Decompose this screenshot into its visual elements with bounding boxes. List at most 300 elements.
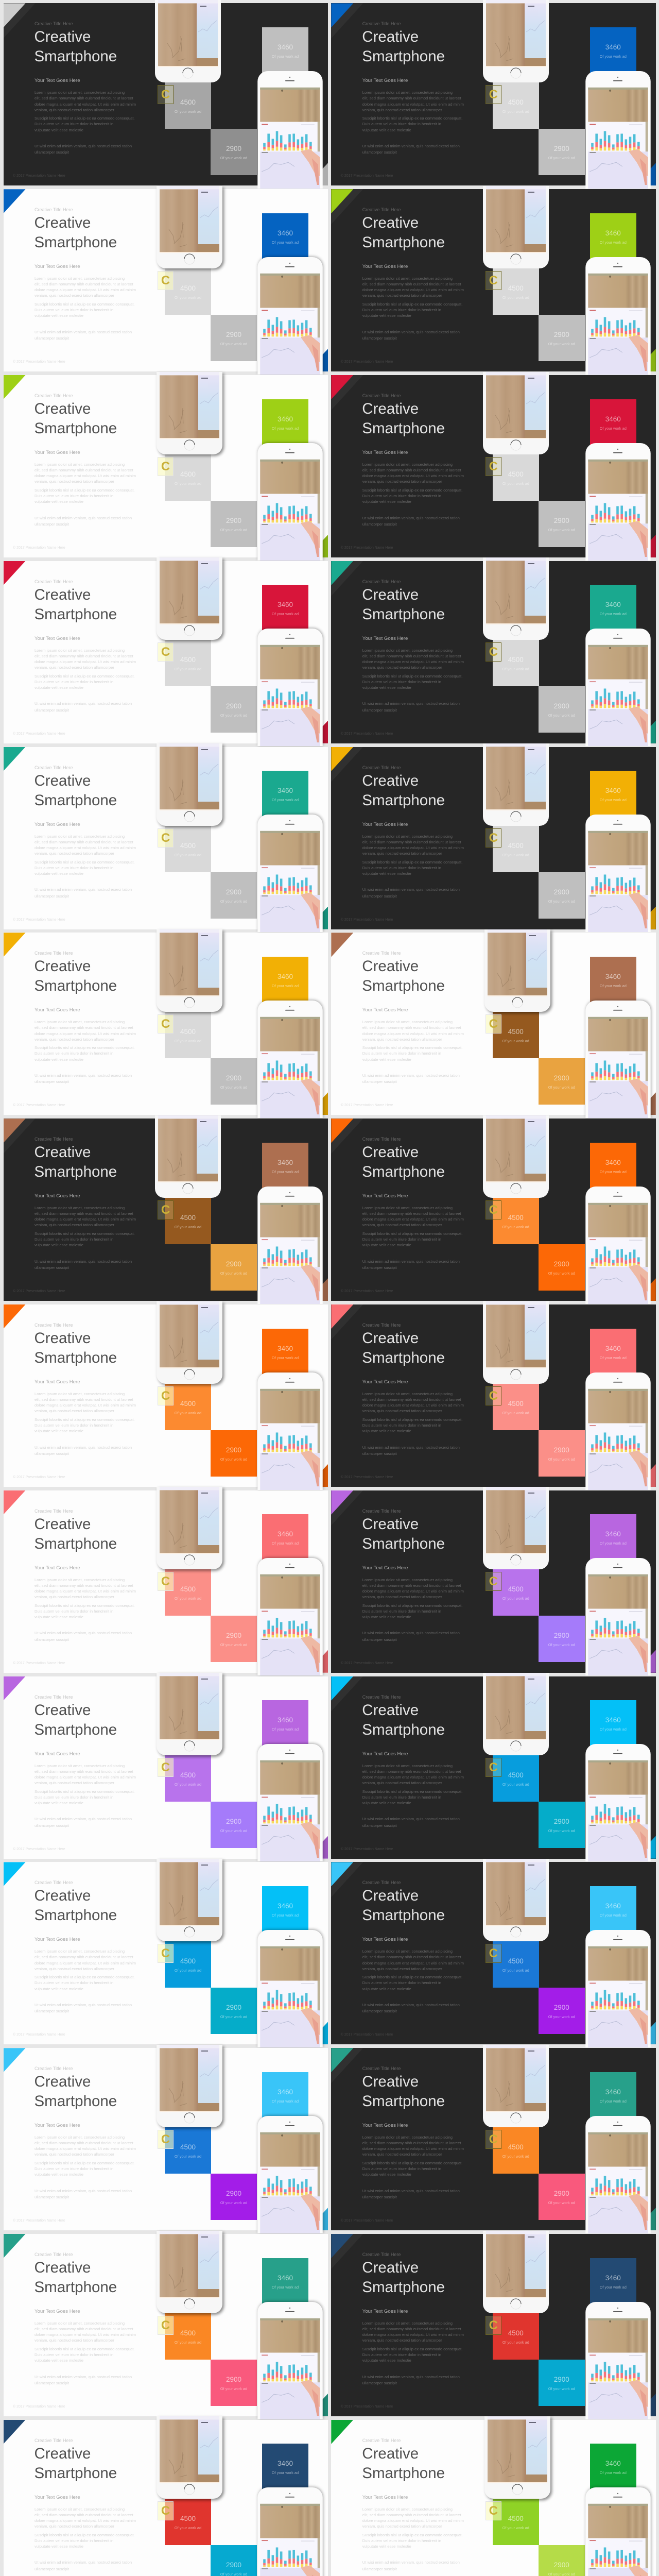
- footer: © 2017 Presentation Name Here: [341, 1848, 393, 1851]
- title: Creative: [34, 28, 91, 45]
- body text: veniam, quis nostrud exerci tation ullamcorper: [34, 665, 114, 670]
- body text: elit, sed diam nonummy nibh euismod tincidunt ut laoreet: [34, 2513, 133, 2517]
- stat C: [539, 501, 585, 547]
- stat C: 2900: [226, 331, 241, 338]
- body text: veniam, quis nostrud exerci tation ullamcorper: [362, 479, 442, 484]
- icon: watermark: [158, 642, 174, 662]
- note: [34, 2002, 132, 2015]
- body text 2: Suscipit lobortis nisl ut aliquip ex ea commodo consequat.: [362, 1603, 462, 1608]
- stat A: Of your work ad: [600, 798, 627, 802]
- title: Smartphone: [34, 1907, 117, 1924]
- stat B: [493, 1755, 539, 1802]
- stat A: Of your work ad: [600, 2470, 627, 2475]
- body text: elit, sed diam nonummy nibh euismod tincidunt ut laoreet: [362, 1025, 461, 1030]
- corner accent: [3, 1862, 26, 1886]
- phone bottom: [257, 629, 323, 746]
- body text 2: Suscipit lobortis nisl ut aliquip ex ea commodo consequat.: [34, 2161, 135, 2165]
- panel: slide 22 dark sky: [331, 1862, 656, 2044]
- icon: watermark: [485, 1386, 501, 1405]
- kicker: Creative Title Here: [34, 951, 73, 956]
- note: ullamcorper suscipit: [34, 708, 69, 713]
- subheading: Your Text Goes Here: [34, 1751, 80, 1757]
- body text 2: vulputate velit esse molestie: [34, 1057, 83, 1062]
- stat C: Of your work ad: [548, 1271, 575, 1276]
- title: Creative: [362, 1702, 419, 1719]
- body text 2: [362, 1603, 462, 1620]
- stat C: 2900: [554, 2561, 569, 2569]
- body text: veniam, quis nostrud exerci tation ullamcorper: [362, 2338, 442, 2343]
- body text 2: vulputate velit esse molestie: [34, 1987, 83, 1991]
- note: Ut wisi enim ad minim veniam, quis nostrud exerci tation: [362, 330, 460, 334]
- phone top: [483, 1673, 549, 1755]
- body text: veniam, quis nostrud exerci tation ullamcorper: [34, 1409, 114, 1413]
- corner accent bottom: [649, 2208, 656, 2230]
- body text: Lorem ipsum dolor sit amet, consectetuer adipiscing: [34, 1578, 125, 1582]
- body text: dolore magna aliquam erat volutpat. Ut wisi enim ad minim: [34, 1031, 136, 1036]
- phone top: [483, 2045, 549, 2127]
- stat C: 2900: [554, 2376, 569, 2383]
- note: [34, 701, 132, 714]
- stat B: 4500: [180, 284, 196, 292]
- kicker: Creative Title Here: [362, 2066, 401, 2071]
- stat C: [539, 1616, 585, 1662]
- stat B: 4500: [508, 2329, 524, 2337]
- body text 2: Duis autem vel eum iriure dolor in hendrerit in: [362, 2538, 441, 2543]
- title: [362, 1886, 445, 1925]
- panel: slide 13 dark brown: [3, 1118, 328, 1301]
- icon: watermark: C: [489, 2132, 498, 2146]
- title: [362, 399, 445, 438]
- subheading: Your Text Goes Here: [362, 636, 408, 641]
- icon: watermark: [485, 1944, 501, 1963]
- body text: [362, 1577, 464, 1600]
- subheading: Your Text Goes Here: [34, 1379, 80, 1385]
- body text: veniam, quis nostrud exerci tation ullamcorper: [34, 1037, 114, 1042]
- note: [34, 2374, 132, 2386]
- stat B: [165, 268, 211, 315]
- subheading: Your Text Goes Here: [34, 2309, 80, 2314]
- body text: veniam, quis nostrud exerci tation ullamcorper: [362, 851, 442, 856]
- kicker: Creative Title Here: [362, 21, 401, 26]
- corner accent: [331, 747, 353, 771]
- stat A: 3460: [605, 601, 621, 608]
- subheading: Your Text Goes Here: [34, 1007, 80, 1013]
- phone top: [483, 1301, 549, 1384]
- body text: Lorem ipsum dolor sit amet, consectetuer adipiscing: [362, 1578, 453, 1582]
- phone top: [157, 2045, 222, 2127]
- kicker: Creative Title Here: [362, 393, 401, 398]
- panel: slide 19 light purple: [3, 1676, 328, 1859]
- body text 2: Duis autem vel eum iriure dolor in hendrerit in: [34, 2352, 113, 2357]
- title: [34, 214, 117, 251]
- corner accent bottom: [321, 907, 328, 929]
- stat B: 4500: [180, 1214, 196, 1222]
- body text: elit, sed diam nonummy nibh euismod tincidunt ut laoreet: [362, 1583, 461, 1588]
- stat B: [165, 1198, 211, 1244]
- body text: veniam, quis nostrud exerci tation ullamcorper: [34, 1595, 114, 1599]
- body text 2: [362, 1974, 462, 1992]
- stat A: Of your work ad: [272, 984, 299, 988]
- panel: slide 28 light green: [331, 2420, 656, 2576]
- stat C: [211, 2360, 257, 2406]
- corner accent bottom: [649, 2022, 656, 2044]
- body text 2: Duis autem vel eum iriure dolor in hendrerit in: [362, 1795, 441, 1800]
- stat C: Of your work ad: [548, 1085, 575, 1090]
- stat B: [493, 2127, 539, 2174]
- icon: watermark: C: [489, 460, 498, 473]
- body text: Lorem ipsum dolor sit amet, consectetuer adipiscing: [362, 2135, 453, 2140]
- stat C: [539, 1430, 585, 1477]
- stat C: Of your work ad: [548, 713, 575, 718]
- corner accent: [331, 3, 353, 27]
- phone bottom: [257, 2487, 323, 2576]
- body text: dolore magna aliquam erat volutpat. Ut wisi enim ad minim: [362, 1589, 464, 1594]
- note: ullamcorper suscipit: [34, 894, 69, 899]
- body text: [362, 1948, 464, 1972]
- stat C: Of your work ad: [220, 1271, 247, 1276]
- body text: elit, sed diam nonummy nibh euismod tincidunt ut laoreet: [362, 1397, 461, 1402]
- icon: watermark: C: [161, 2504, 170, 2518]
- icon: watermark: C: [489, 88, 498, 101]
- stat B: Of your work ad: [175, 2340, 201, 2345]
- body text: dolore magna aliquam erat volutpat. Ut wisi enim ad minim: [34, 845, 136, 850]
- note: Ut wisi enim ad minim veniam, quis nostrud exerci tation: [34, 1073, 132, 1078]
- body text: Lorem ipsum dolor sit amet, consectetuer adipiscing: [34, 90, 125, 95]
- panel: slide 6 dark red: [331, 375, 656, 557]
- footer: © 2017 Presentation Name Here: [341, 732, 393, 736]
- icon: watermark: [485, 1014, 501, 1033]
- note: Ut wisi enim ad minim veniam, quis nostrud exerci tation: [362, 1631, 460, 1635]
- stat B: Of your work ad: [502, 2340, 529, 2345]
- stat C: 2900: [554, 888, 569, 896]
- note: Ut wisi enim ad minim veniam, quis nostrud exerci tation: [34, 887, 132, 892]
- body text 2: vulputate velit esse molestie: [362, 128, 411, 132]
- body text: [34, 1948, 136, 1972]
- icon: watermark: C: [489, 1017, 498, 1031]
- stat C: Of your work ad: [220, 1642, 247, 1647]
- note: Ut wisi enim ad minim veniam, quis nostrud exerci tation: [362, 1445, 460, 1450]
- stat B: 4500: [508, 1400, 524, 1408]
- body text: veniam, quis nostrud exerci tation ullamcorper: [34, 293, 114, 298]
- corner accent bottom: [321, 1092, 328, 1115]
- body text: elit, sed diam nonummy nibh euismod tincidunt ut laoreet: [34, 96, 133, 100]
- stat A: Of your work ad: [600, 612, 627, 616]
- title: Smartphone: [362, 2279, 445, 2296]
- phone bottom: [585, 71, 651, 189]
- body text 2: vulputate velit esse molestie: [362, 1429, 411, 1433]
- title: Smartphone: [362, 420, 445, 437]
- footer: © 2017 Presentation Name Here: [13, 918, 65, 922]
- stat B: [165, 1384, 211, 1430]
- stat B: [165, 1012, 211, 1058]
- body text 2: Suscipit lobortis nisl ut aliquip ex ea commodo consequat.: [34, 1789, 135, 1794]
- subheading: Your Text Goes Here: [362, 78, 408, 83]
- body text 2: [34, 2346, 135, 2363]
- body text: dolore magna aliquam erat volutpat. Ut wisi enim ad minim: [362, 1961, 464, 1965]
- body text 2: vulputate velit esse molestie: [362, 2544, 411, 2549]
- body text 2: Suscipit lobortis nisl ut aliquip ex ea commodo consequat.: [362, 116, 462, 121]
- body text: veniam, quis nostrud exerci tation ullamcorper: [362, 1223, 442, 1227]
- title: Smartphone: [34, 606, 117, 623]
- kicker: Creative Title Here: [362, 1694, 401, 1700]
- body text 2: [362, 487, 462, 504]
- stat C: 2900: [226, 1446, 241, 1454]
- body text 2: Duis autem vel eum iriure dolor in hendrerit in: [34, 1795, 113, 1800]
- body text 2: vulputate velit esse molestie: [362, 499, 411, 504]
- note: [34, 2560, 132, 2572]
- corner accent: [3, 189, 26, 213]
- panel: slide 11 light amber: [3, 933, 328, 1115]
- body text 2: [362, 301, 462, 318]
- body text 2: vulputate velit esse molestie: [34, 1615, 83, 1619]
- note: Ut wisi enim ad minim veniam, quis nostrud exerci tation: [362, 515, 460, 520]
- body text 2: Duis autem vel eum iriure dolor in hendrerit in: [362, 1051, 441, 1056]
- stat B: 4500: [180, 2143, 196, 2151]
- footer: © 2017 Presentation Name Here: [13, 1476, 65, 1479]
- body text: [34, 1577, 136, 1600]
- body text 2: vulputate velit esse molestie: [362, 1243, 411, 1247]
- body text: Lorem ipsum dolor sit amet, consectetuer adipiscing: [34, 1949, 125, 1954]
- stat B: 4500: [180, 1028, 196, 1036]
- corner accent bottom: [322, 349, 328, 371]
- note: Ut wisi enim ad minim veniam, quis nostrud exerci tation: [362, 1259, 460, 1264]
- stat A: 3460: [605, 2088, 621, 2096]
- stat B: 4500: [180, 98, 196, 106]
- body text: dolore magna aliquam erat volutpat. Ut wisi enim ad minim: [34, 1217, 136, 1222]
- phone bottom: [585, 1187, 651, 1304]
- body text: [362, 834, 464, 856]
- body text 2: Suscipit lobortis nisl ut aliquip ex ea commodo consequat.: [34, 488, 135, 493]
- stat C: Of your work ad: [220, 1828, 247, 1833]
- title: Smartphone: [34, 420, 117, 437]
- stat C: 2900: [554, 702, 569, 710]
- stat B: 4500: [180, 470, 196, 478]
- body text 2: Suscipit lobortis nisl ut aliquip ex ea commodo consequat.: [34, 116, 135, 121]
- note: Ut wisi enim ad minim veniam, quis nostrud exerci tation: [362, 1073, 460, 1078]
- stat C: 2900: [554, 2004, 569, 2011]
- footer: © 2017 Presentation Name Here: [13, 174, 65, 178]
- body text: [34, 2320, 136, 2343]
- corner accent: [3, 3, 26, 27]
- body text: Lorem ipsum dolor sit amet, consectetuer adipiscing: [34, 834, 125, 839]
- body text 2: Duis autem vel eum iriure dolor in hendrerit in: [34, 1051, 113, 1056]
- title: [362, 1143, 445, 1182]
- stat A: Of your work ad: [272, 1727, 299, 1732]
- stat B: [493, 1198, 539, 1244]
- title: [34, 1701, 117, 1740]
- icon: watermark: C: [489, 1760, 498, 1774]
- subheading: Your Text Goes Here: [362, 450, 408, 455]
- note: Ut wisi enim ad minim veniam, quis nostrud exerci tation: [362, 2003, 460, 2007]
- body text 2: vulputate velit esse molestie: [362, 1057, 411, 1062]
- body text: elit, sed diam nonummy nibh euismod tincidunt ut laoreet: [34, 1025, 133, 1030]
- body text 2: Suscipit lobortis nisl ut aliquip ex ea commodo consequat.: [362, 1417, 462, 1422]
- body text: Lorem ipsum dolor sit amet, consectetuer adipiscing: [362, 1206, 453, 1210]
- stat B: 4500: [180, 2515, 196, 2522]
- title: Creative: [362, 1516, 419, 1533]
- stat A: [590, 585, 636, 631]
- body text 2: Suscipit lobortis nisl ut aliquip ex ea commodo consequat.: [362, 674, 462, 679]
- stat A: 3460: [278, 787, 293, 794]
- note: [34, 1445, 132, 1457]
- stat A: [262, 1514, 308, 1561]
- stat A: [262, 771, 308, 817]
- footer: © 2017 Presentation Name Here: [341, 2405, 393, 2409]
- body text: veniam, quis nostrud exerci tation ullamcorper: [34, 108, 114, 112]
- stat B: Of your work ad: [175, 481, 201, 486]
- title: Creative: [362, 2073, 419, 2090]
- body text: [362, 1205, 464, 1228]
- body text: elit, sed diam nonummy nibh euismod tincidunt ut laoreet: [34, 1397, 133, 1402]
- body text 2: vulputate velit esse molestie: [34, 499, 83, 504]
- panel: slide 5 light lime: [3, 375, 328, 557]
- title: Creative: [34, 586, 91, 603]
- stat B: 4500: [180, 842, 196, 850]
- body text 2: Duis autem vel eum iriure dolor in hendrerit in: [362, 308, 441, 312]
- stat C: 2900: [226, 1818, 241, 1825]
- stat B: Of your work ad: [502, 109, 529, 114]
- body text: elit, sed diam nonummy nibh euismod tincidunt ut laoreet: [34, 1583, 133, 1588]
- body text 2: Duis autem vel eum iriure dolor in hendrerit in: [34, 122, 113, 126]
- stat B: Of your work ad: [175, 1225, 201, 1229]
- stat A: Of your work ad: [272, 426, 299, 431]
- kicker: Creative Title Here: [34, 2252, 73, 2257]
- subheading: Your Text Goes Here: [362, 2309, 408, 2314]
- kicker: Creative Title Here: [362, 765, 401, 770]
- body text 2: Duis autem vel eum iriure dolor in hendrerit in: [362, 1609, 441, 1614]
- corner accent: [331, 1490, 353, 1515]
- stat C: 2900: [226, 1260, 241, 1268]
- footer: © 2017 Presentation Name Here: [13, 546, 65, 550]
- title: Smartphone: [362, 792, 445, 809]
- body text 2: Suscipit lobortis nisl ut aliquip ex ea commodo consequat.: [34, 674, 135, 679]
- stat C: 2900: [226, 517, 241, 524]
- stat A: [590, 1514, 636, 1561]
- phone top: [157, 1673, 222, 1755]
- body text: elit, sed diam nonummy nibh euismod tincidunt ut laoreet: [34, 2141, 133, 2145]
- footer: © 2017 Presentation Name Here: [13, 2405, 65, 2409]
- stat C: [539, 2360, 585, 2406]
- title: Creative: [34, 1702, 91, 1719]
- icon: watermark: [158, 85, 174, 104]
- corner accent bottom: [649, 1836, 656, 1859]
- title: Creative: [362, 400, 419, 417]
- body text: elit, sed diam nonummy nibh euismod tincidunt ut laoreet: [362, 2513, 461, 2517]
- body text: elit, sed diam nonummy nibh euismod tincidunt ut laoreet: [362, 840, 461, 844]
- body text: elit, sed diam nonummy nibh euismod tincidunt ut laoreet: [34, 468, 133, 472]
- note: [362, 329, 460, 342]
- body text: dolore magna aliquam erat volutpat. Ut wisi enim ad minim: [34, 1589, 136, 1594]
- stat C: Of your work ad: [220, 1085, 247, 1090]
- stat B: [493, 1012, 539, 1058]
- body text 2: [34, 673, 135, 690]
- title: Smartphone: [362, 2465, 445, 2482]
- note: ullamcorper suscipit: [34, 2567, 69, 2571]
- stat A: Of your work ad: [600, 2099, 627, 2104]
- stat B: Of your work ad: [175, 1782, 201, 1787]
- stat C: [211, 315, 257, 361]
- title: [34, 771, 117, 810]
- stat C: Of your work ad: [220, 2386, 247, 2391]
- stat B: 4500: [508, 2143, 524, 2151]
- phone top: [155, 1115, 221, 1198]
- corner accent bottom: [322, 163, 328, 185]
- phone top: [484, 929, 550, 1012]
- body text 2: Suscipit lobortis nisl ut aliquip ex ea commodo consequat.: [362, 1231, 462, 1236]
- body text: [34, 2134, 136, 2158]
- icon: watermark: [158, 828, 174, 848]
- title: Creative: [34, 2073, 91, 2090]
- title: [362, 213, 445, 252]
- body text 2: Duis autem vel eum iriure dolor in hendrerit in: [362, 494, 441, 498]
- body text 2: Duis autem vel eum iriure dolor in hendrerit in: [362, 1423, 441, 1428]
- note: [362, 1259, 460, 1272]
- body text 2: vulputate velit esse molestie: [34, 685, 83, 690]
- body text 2: [34, 1974, 135, 1992]
- stat A: [262, 2072, 308, 2119]
- stat A: Of your work ad: [272, 2470, 299, 2475]
- note: ullamcorper suscipit: [362, 150, 397, 155]
- stat A: [590, 27, 636, 74]
- body text 2: [362, 2532, 462, 2549]
- panel: slide 27 light navy: [3, 2420, 328, 2576]
- body text 2: [34, 859, 135, 876]
- stat A: [590, 771, 636, 817]
- stat C: Of your work ad: [548, 2200, 575, 2205]
- stat C: 2900: [554, 1074, 569, 1082]
- note: ullamcorper suscipit: [362, 1823, 397, 1828]
- note: [362, 515, 460, 528]
- stat B: [165, 1569, 211, 1616]
- body text: Lorem ipsum dolor sit amet, consectetuer adipiscing: [362, 1392, 453, 1396]
- body text: [362, 1763, 464, 1786]
- stat C: [211, 1244, 257, 1291]
- body text: [34, 2506, 136, 2529]
- stat A: Of your work ad: [600, 1170, 627, 1174]
- stat C: [539, 129, 585, 175]
- subheading: Your Text Goes Here: [34, 1193, 80, 1199]
- body text 2: [34, 1231, 135, 1248]
- body text: elit, sed diam nonummy nibh euismod tincidunt ut laoreet: [362, 2327, 461, 2331]
- stat B: [493, 268, 539, 315]
- body text: dolore magna aliquam erat volutpat. Ut wisi enim ad minim: [34, 1403, 136, 1408]
- stat A: 3460: [278, 415, 293, 423]
- body text 2: vulputate velit esse molestie: [362, 1801, 411, 1805]
- subheading: Your Text Goes Here: [362, 1937, 408, 1942]
- body text 2: [362, 1045, 462, 1062]
- subheading: Your Text Goes Here: [362, 1379, 408, 1385]
- title: [362, 2072, 445, 2111]
- stat A: 3460: [605, 43, 621, 51]
- note: ullamcorper suscipit: [362, 1451, 397, 1456]
- body text: dolore magna aliquam erat volutpat. Ut wisi enim ad minim: [362, 287, 464, 292]
- note: Ut wisi enim ad minim veniam, quis nostrud exerci tation: [34, 2374, 132, 2379]
- stat B: [165, 826, 211, 872]
- stat C: 2900: [554, 1260, 569, 1268]
- stat A: Of your work ad: [272, 612, 299, 616]
- stat C: [211, 686, 257, 733]
- stat B: Of your work ad: [502, 1039, 529, 1043]
- corner accent bottom: [649, 2394, 656, 2416]
- body text: elit, sed diam nonummy nibh euismod tincidunt ut laoreet: [34, 2327, 133, 2331]
- body text 2: vulputate velit esse molestie: [362, 2358, 411, 2363]
- stat B: Of your work ad: [502, 1782, 529, 1787]
- corner accent: [331, 189, 353, 213]
- stat C: [211, 2545, 257, 2576]
- stat A: [590, 1700, 636, 1747]
- stat A: 3460: [605, 2460, 621, 2467]
- stat A: 3460: [278, 1902, 293, 1910]
